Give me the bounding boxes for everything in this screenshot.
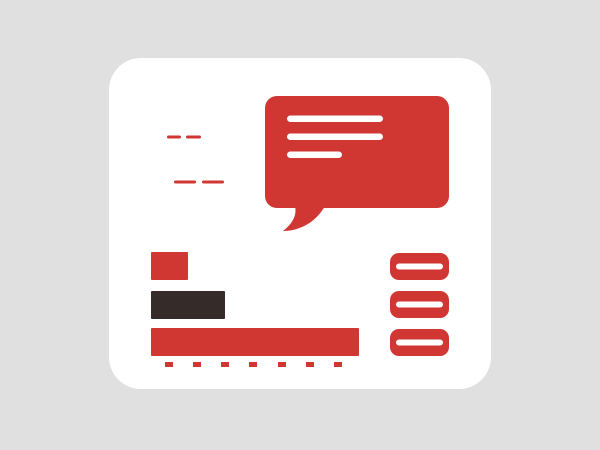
panel: card: [109, 58, 491, 389]
axis ticks: [165, 362, 342, 367]
icon: dashes bottom: [174, 180, 224, 184]
bar chart: [151, 252, 359, 367]
icon: speech bubble: [265, 96, 449, 231]
icon: dashes top: [167, 136, 201, 138]
buttons: [390, 253, 449, 356]
text lines in bubble: [287, 116, 383, 158]
